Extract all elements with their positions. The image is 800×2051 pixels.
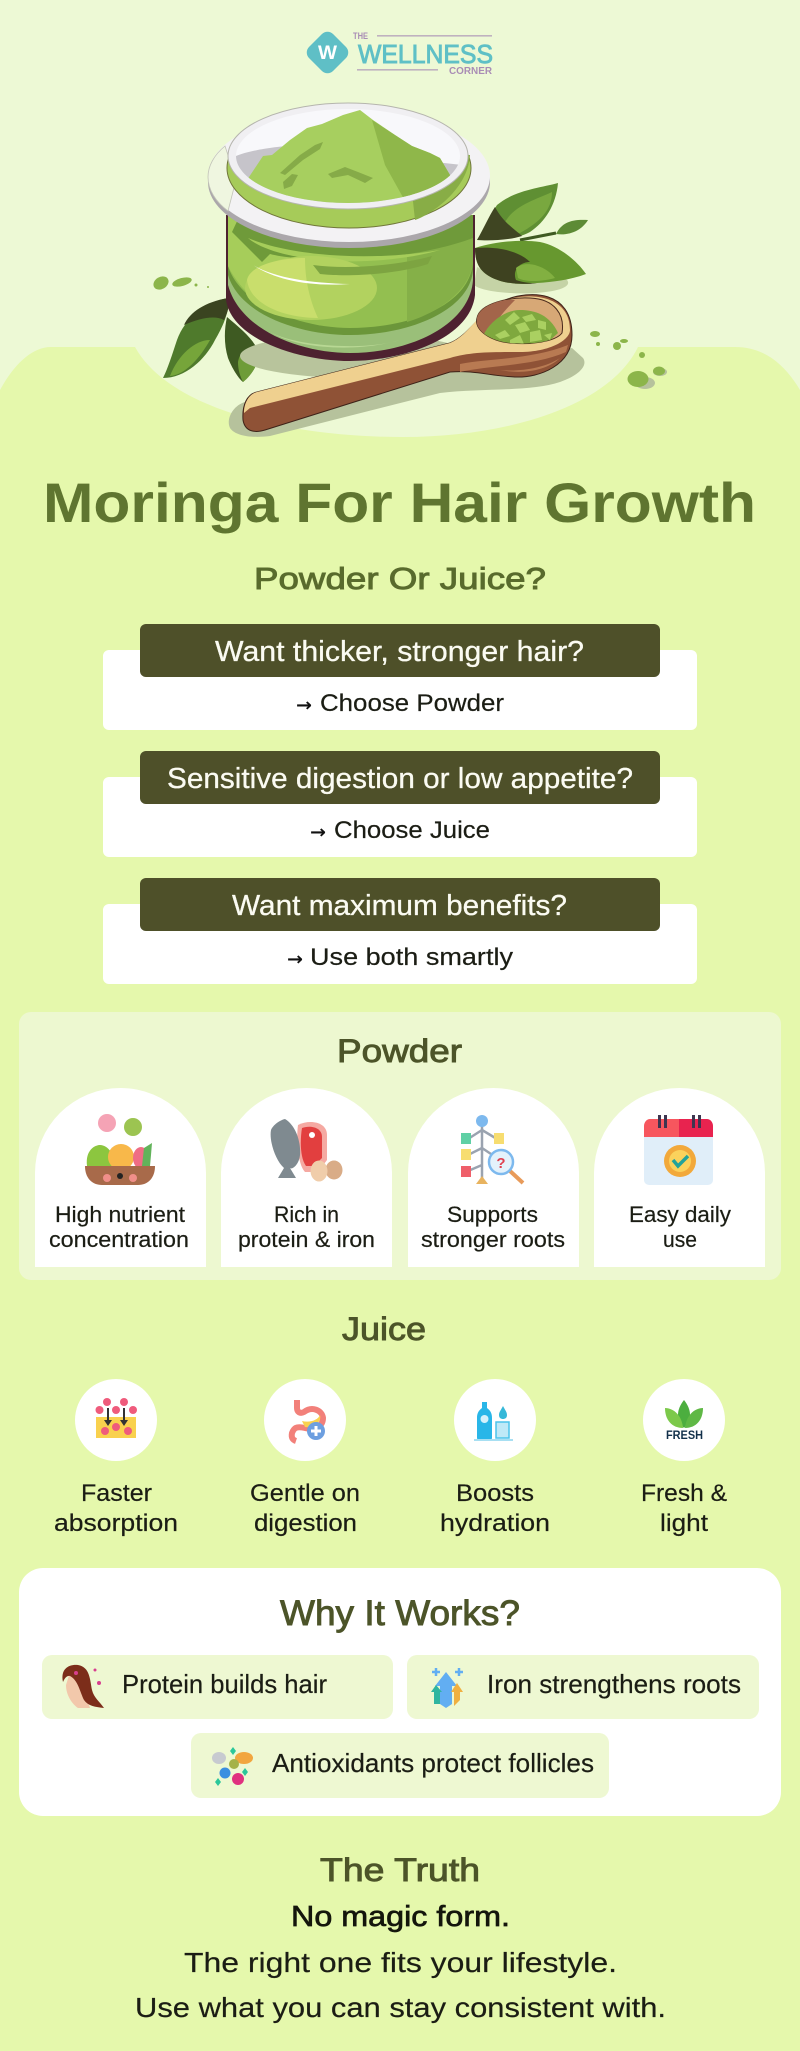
card: stronger roots: Supports	[447, 1202, 538, 1227]
subtitle: Powder Or Juice?	[254, 561, 546, 596]
card: thicker hair: →	[296, 695, 312, 716]
card: high nutrient: High nutrient	[55, 1202, 185, 1227]
lower left leaf pair	[163, 298, 258, 382]
panel: powder	[19, 1012, 781, 1280]
item: fresh and light: Fresh &	[641, 1480, 727, 1507]
card: protein and iron: Rich in	[274, 1202, 339, 1227]
upper right leaf	[477, 183, 558, 240]
item: boosts hydration: hydration	[440, 1510, 550, 1537]
shadow	[474, 267, 568, 293]
logo: WELLNESS	[358, 39, 493, 69]
section: juice	[54, 1311, 727, 1537]
section: the truth	[135, 1852, 666, 2023]
spoon shadow	[229, 348, 584, 437]
item: boosts hydration: Boosts	[456, 1480, 534, 1507]
jar lid flange	[208, 108, 490, 248]
pill: antioxidants: Antioxidants protect follicles	[272, 1748, 594, 1778]
card: maximum benefits	[103, 878, 697, 984]
logo: CORNER	[449, 66, 493, 77]
illustration: moringa powder jar with spoon and leaves	[151, 103, 667, 437]
card: maximum benefits: →	[287, 949, 303, 970]
item: gentle on digestion: Gentle on	[250, 1480, 360, 1507]
item: faster absorption: absorption	[54, 1510, 178, 1537]
pill: iron	[407, 1655, 759, 1719]
card: sensitive digestion	[103, 751, 697, 857]
card: easy daily use: use	[663, 1227, 697, 1252]
small right leaf	[520, 220, 588, 240]
card: protein and iron: protein & iron	[238, 1227, 375, 1252]
card: maximum benefits: Want maximum benefits?	[232, 890, 567, 922]
item: fresh and light: FRESH	[666, 1428, 703, 1442]
panel: why it works	[19, 1568, 781, 1816]
heading: powder: Powder	[337, 1033, 462, 1069]
item: gentle on digestion	[250, 1379, 360, 1537]
wooden spoon	[243, 295, 572, 431]
text: right one: The right one fits your lifestyle.	[184, 1947, 617, 1978]
card: sensitive digestion: →	[310, 822, 326, 843]
jar shadow	[240, 334, 470, 378]
text: no magic form: No magic form.	[291, 1901, 510, 1933]
item: boosts hydration	[440, 1379, 550, 1537]
lower right leaf	[475, 241, 586, 284]
logo: W	[318, 43, 337, 64]
card: thicker hair	[103, 624, 697, 730]
card: stronger roots	[408, 1088, 579, 1267]
card: thicker hair: Want thicker, stronger hair?	[215, 636, 584, 668]
heading: juice: Juice	[342, 1311, 426, 1347]
card: thicker hair: Choose Powder	[320, 690, 504, 717]
pill: iron: Iron strengthens roots	[487, 1669, 741, 1699]
jar powder	[236, 109, 462, 210]
pill: antioxidants	[191, 1733, 609, 1798]
pill: protein	[42, 1655, 393, 1719]
hero background	[0, 0, 800, 437]
logo: THE	[353, 31, 368, 41]
card: sensitive digestion: Sensitive digestion or low appetite?	[167, 763, 633, 795]
jar inner ring	[228, 103, 468, 209]
heading: the truth: The Truth	[320, 1852, 480, 1888]
item: gentle on digestion: digestion	[254, 1510, 357, 1537]
card: easy daily use: Easy daily	[629, 1202, 731, 1227]
item: fresh and light: light	[660, 1510, 708, 1537]
card: stronger roots: ?	[496, 1155, 506, 1172]
card: protein and iron	[221, 1088, 392, 1267]
title: Moringa For Hair Growth	[43, 471, 756, 534]
jar body	[226, 215, 475, 361]
item: fresh and light	[641, 1379, 727, 1537]
card: sensitive digestion: Choose Juice	[334, 817, 490, 844]
text: consistency: Use what you can stay consistent with.	[135, 1992, 666, 2023]
card: high nutrient: concentration	[49, 1227, 189, 1252]
powder crumbs	[151, 274, 667, 389]
item: faster absorption: Faster	[81, 1480, 152, 1507]
card: stronger roots: stronger roots	[421, 1227, 565, 1252]
item: faster absorption	[54, 1379, 178, 1537]
card: high nutrient	[35, 1088, 206, 1267]
card: maximum benefits: Use both smartly	[310, 944, 513, 971]
heading: why it works: Why It Works?	[280, 1594, 520, 1633]
logo	[303, 28, 493, 77]
card: easy daily use	[594, 1088, 765, 1267]
pill: protein: Protein builds hair	[122, 1669, 327, 1699]
